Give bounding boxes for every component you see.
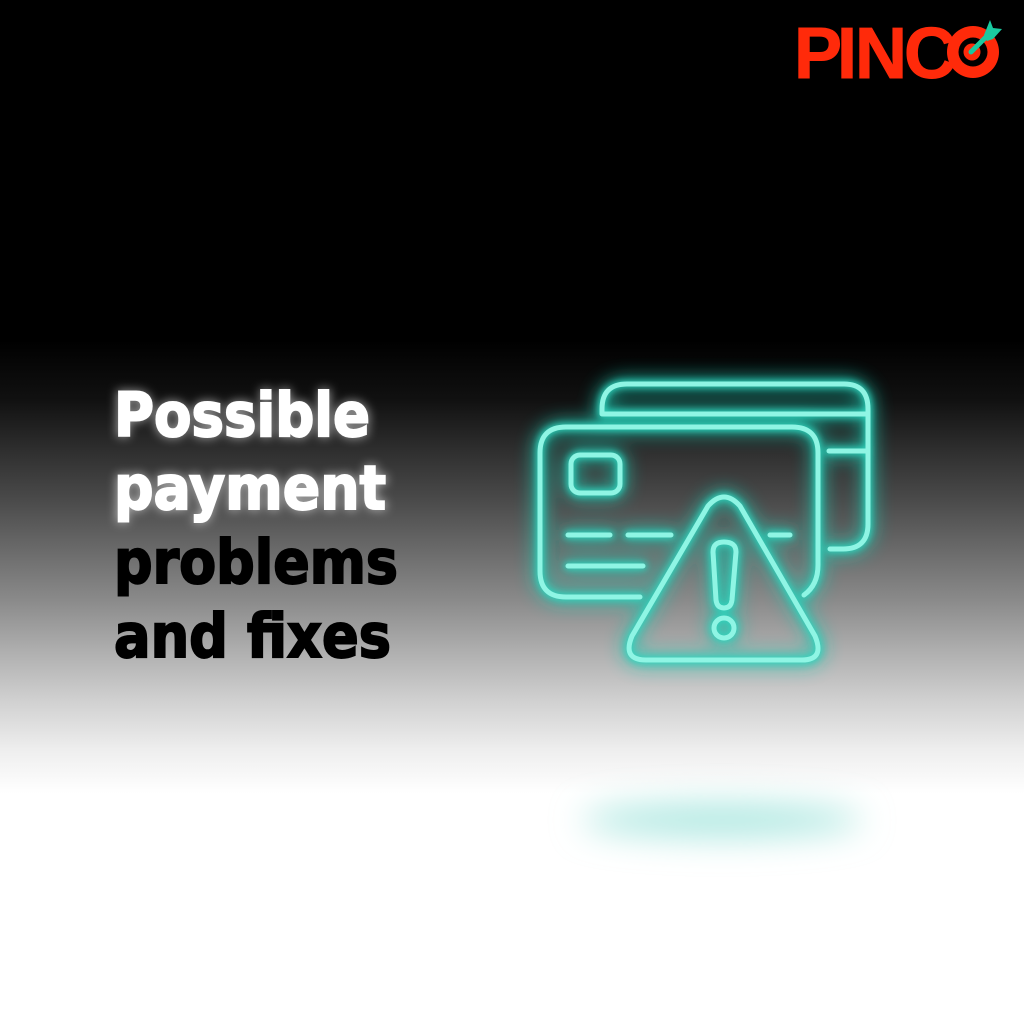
heading glow: payment (113, 453, 387, 524)
logo: PINCO: PINC (794, 14, 956, 94)
heading line: problems: problems (114, 527, 398, 598)
heading line: Possible: Possible (114, 380, 370, 451)
heading: Possible payment problems and fixes (113, 380, 398, 672)
logo target (947, 20, 1002, 78)
heading glow (113, 380, 387, 524)
heading line: payment: payment (114, 453, 386, 524)
heading line: and fixes: and fixes (114, 601, 391, 672)
heading glow: Possible (113, 380, 371, 451)
icon: neon credit cards with warning triangle (540, 384, 868, 660)
icon shadow on the floor (582, 804, 862, 836)
